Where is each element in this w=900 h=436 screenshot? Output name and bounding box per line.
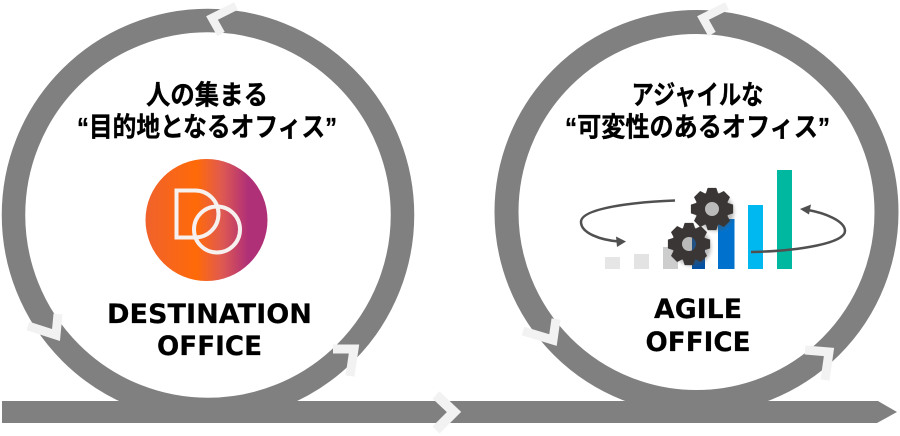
heading: destination office: [77, 80, 337, 142]
heading: agile office: [565, 80, 830, 142]
heading: agile office: アジャイルな: [632, 80, 764, 110]
ring chevron: lower right: [805, 350, 829, 380]
ring: destination office: [14, 20, 402, 410]
label: destination office: OFFICE: [157, 331, 262, 362]
bar chart with gears: [581, 170, 845, 269]
ring chevron: lower right: [333, 349, 354, 376]
label: destination office: [107, 299, 312, 362]
arrow: left loop: [581, 200, 675, 247]
panel: destination office cycle: [14, 6, 402, 410]
label: agile office: OFFICE: [646, 327, 750, 358]
ring chevron: top: [212, 6, 236, 34]
ring chevron: lower left: [28, 314, 58, 335]
ring chevron: lower left: [523, 319, 556, 340]
logo: DO circle: [146, 159, 268, 281]
arrow: right loop: [751, 204, 845, 252]
timeline arrow: [2, 401, 897, 423]
timeline chevron: [436, 395, 454, 430]
label: destination office: DESTINATION: [107, 299, 312, 330]
bars: [605, 170, 792, 269]
gear: lower: [668, 223, 711, 266]
panel: agile office cycle: [506, 6, 886, 402]
heading: destination office: “目的地となるオフィス”: [77, 112, 337, 142]
heading: destination office: 人の集まる: [146, 80, 268, 110]
label: agile office: [646, 294, 750, 358]
ring: agile office: [506, 22, 886, 402]
ring chevron: top: [703, 6, 727, 34]
label: agile office: AGILE: [654, 294, 742, 325]
gear: upper: [691, 188, 734, 231]
heading: agile office: “可変性のあるオフィス”: [565, 112, 830, 142]
